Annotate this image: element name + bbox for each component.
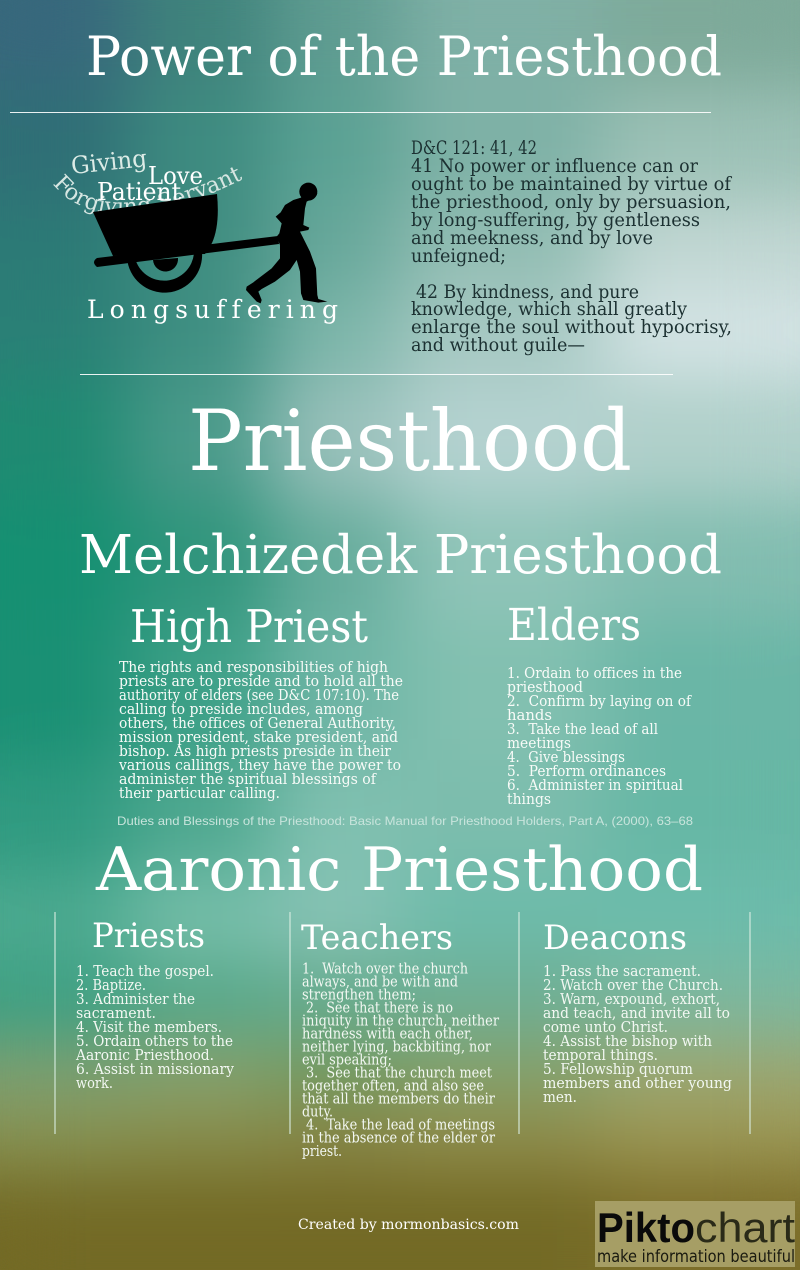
scripture passage: the priesthood, only by persuasion,	[411, 192, 731, 213]
credit: Created by mormonbasics.com	[298, 1217, 519, 1233]
list of duties: 4. Give blessings	[507, 748, 625, 766]
column dividers	[54, 912, 751, 1134]
list of duties: 4. Assist the bishop with	[543, 1032, 712, 1050]
heading: Priesthood: Priesthood	[188, 392, 632, 490]
list of duties: 2. Confirm by laying on of	[507, 692, 692, 710]
list of duties: 3. Administer the	[76, 990, 195, 1008]
heading: Aaronic Priesthood: Aaronic Priesthood	[95, 835, 703, 905]
word cloud of virtues	[53, 144, 242, 214]
description: mission president, stake president, and	[119, 728, 398, 746]
heading: Teachers	[301, 918, 453, 958]
list of duties: 2. Watch over the Church.	[543, 976, 723, 994]
list of duties: iniquity in the church, neither	[302, 1012, 500, 1030]
list of duties: 5. Perform ordinances	[507, 762, 666, 780]
description: their particular calling.	[119, 784, 280, 802]
list of duties: priesthood	[507, 678, 583, 696]
list of duties: evil speaking;	[302, 1050, 392, 1068]
list of duties	[75, 962, 234, 1092]
scripture passage: and without guile—	[411, 335, 585, 356]
caption: longsuffering: Longsuffering	[87, 295, 338, 324]
word cloud of virtues: Giving	[70, 144, 148, 180]
list of duties	[543, 962, 732, 1106]
list of duties: work.	[76, 1074, 113, 1092]
panel: High Priest	[118, 600, 403, 802]
top divider	[10, 112, 711, 113]
list of duties	[302, 960, 500, 1160]
list of duties: meetings	[507, 734, 571, 752]
list of duties: neither lying, backbiting, nor	[302, 1038, 492, 1056]
list of duties: 1. Watch over the church	[302, 960, 468, 978]
list of duties: and teach, and invite all to	[543, 1004, 730, 1022]
heading: Priests	[92, 916, 205, 956]
list of duties	[507, 664, 692, 808]
description: administer the spiritual blessings of	[119, 770, 377, 788]
middle divider	[80, 374, 673, 375]
panel: Elders	[507, 600, 692, 808]
list of duties: 6. Administer in spiritual	[507, 776, 683, 794]
word cloud of virtues: Patient	[97, 178, 181, 206]
list of duties: that all the members do their	[302, 1090, 496, 1108]
description: calling to preside includes, among	[119, 700, 363, 718]
list of duties: 2. Baptize.	[76, 976, 146, 994]
list of duties: 1. Pass the sacrament.	[543, 962, 701, 980]
list of duties: priest.	[302, 1142, 342, 1160]
scripture passage: enlarge the soul without hypocrisy,	[411, 317, 732, 338]
logo: Piktochart: Pikto	[597, 1204, 695, 1251]
logo: Piktochart	[595, 1201, 795, 1267]
list of duties: 3. Warn, expound, exhort,	[543, 990, 720, 1008]
list of duties: duty.	[302, 1102, 333, 1120]
scripture passage	[411, 138, 732, 356]
scripture passage: 42 By kindness, and pure	[416, 282, 639, 303]
panel: Teachers	[301, 918, 500, 1160]
list of duties: 1. Ordain to offices in the	[507, 664, 682, 682]
scripture passage: and meekness, and by love	[411, 228, 653, 249]
list of duties: in the absence of the elder or	[302, 1128, 496, 1146]
list of duties: always, and be with and	[302, 972, 458, 990]
list of duties: members and other young	[543, 1074, 732, 1092]
title: Power of the Priesthood	[86, 25, 722, 88]
panel: Deacons	[543, 918, 732, 1106]
list of duties: together often, and also see	[302, 1076, 484, 1094]
panel: Priests	[75, 916, 234, 1092]
scripture passage: D&C 121: 41, 42	[411, 138, 537, 159]
list of duties: 3. See that the church meet	[306, 1064, 492, 1082]
scripture passage: 41 No power or influence can or	[411, 156, 698, 177]
list of duties: Aaronic Priesthood.	[75, 1046, 214, 1064]
list of duties: temporal things.	[543, 1046, 658, 1064]
list of duties: 5. Fellowship quorum	[543, 1060, 693, 1078]
list of duties: hands	[507, 706, 552, 724]
list of duties: hardness with each other,	[302, 1024, 473, 1042]
scripture passage: by long-suffering, by gentleness	[411, 210, 700, 231]
scripture passage: ought to be maintained by virtue of	[411, 174, 732, 195]
list of duties: sacrament.	[76, 1004, 156, 1022]
heading: High Priest	[130, 600, 368, 653]
description: The rights and responsibilities of high	[119, 658, 388, 676]
list of duties: come unto Christ.	[543, 1018, 668, 1036]
list of duties: 5. Ordain others to the	[76, 1032, 233, 1050]
logo: Piktochart: chart	[695, 1204, 795, 1251]
description: others, the offices of General Authority,	[119, 714, 396, 732]
word cloud of virtues: Love	[148, 162, 203, 190]
list of duties: men.	[543, 1088, 577, 1106]
illustration: man pulling wheelbarrow of virtues	[53, 144, 338, 324]
scripture passage: knowledge, which shall greatly	[411, 299, 688, 320]
description: priests are to preside and to hold all the	[119, 672, 403, 690]
list of duties: 6. Assist in missionary	[76, 1060, 234, 1078]
description: various callings, they have the power to	[118, 756, 401, 774]
list of duties: 4. Take the lead of meetings	[306, 1116, 495, 1134]
heading: Elders	[507, 600, 641, 651]
list of duties: strengthen them;	[302, 986, 416, 1004]
word cloud of virtues: Forgiving Servant	[53, 167, 242, 214]
description: bishop. As high priests preside in their	[119, 742, 392, 760]
description: authority of elders (see D&C 107:10). The	[119, 686, 399, 704]
heading: Deacons	[543, 918, 687, 958]
scripture passage: unfeigned;	[411, 246, 506, 267]
icon: wheelbarrow	[93, 194, 279, 293]
citation: Duties and Blessings of the Priesthood: Basic Manual for Priesthood Holders, Part A, (2000), 63–68	[117, 814, 693, 828]
list of duties: 4. Visit the members.	[76, 1018, 222, 1036]
list of duties: things	[507, 790, 551, 808]
icon: walking man	[246, 183, 327, 303]
heading: Melchizedek Priesthood: Melchizedek Priesthood	[79, 525, 722, 586]
list of duties: 3. Take the lead of all	[507, 720, 658, 738]
description	[118, 658, 403, 802]
list of duties: 1. Teach the gospel.	[76, 962, 214, 980]
list of duties: 2. See that there is no	[306, 998, 453, 1016]
